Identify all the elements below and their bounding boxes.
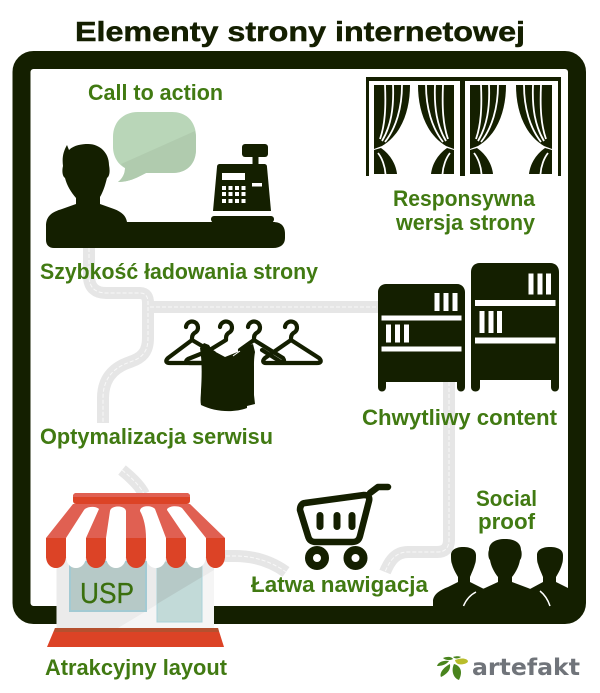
icon: tank top (200, 343, 255, 411)
logo wordmark: artefakt (472, 655, 580, 681)
icon: group of people (433, 539, 568, 607)
label: social: Social (476, 486, 537, 511)
label: responsive line two: wersja strony (395, 210, 536, 235)
label: attractive layout: Atrakcyjny layout (45, 655, 228, 680)
logo: artefakt (437, 655, 580, 681)
panel: storefront (45, 493, 228, 680)
icon: speech bubble (113, 112, 196, 182)
label: catchy content: Chwytliwy content (362, 405, 558, 430)
panel: social proof (433, 486, 568, 607)
road network (89, 248, 449, 572)
title: Elementy strony internetowej (75, 16, 525, 47)
panel: catchy content (362, 263, 559, 430)
icon: logo leaves (437, 656, 468, 680)
heading: call to action: Call to action (88, 80, 223, 105)
label: USP: USP (80, 578, 134, 610)
panel: call to action (40, 80, 319, 284)
icon: shopping cart (300, 487, 388, 566)
label: optimisation: Optymalizacja serwisu (40, 424, 273, 449)
frame (22, 60, 577, 615)
icon: left bookshelf (378, 284, 465, 392)
label: page speed: Szybkość ładowania strony (40, 259, 319, 284)
label: responsive line one: Responsywna (393, 186, 536, 211)
icon: cash register (211, 144, 274, 222)
icon: striped awning (46, 493, 225, 568)
label: proof: proof (478, 509, 536, 534)
panel: responsive version (366, 77, 561, 235)
icon: person silhouette at counter (46, 144, 285, 248)
icon: right bookshelf (471, 263, 559, 392)
label: easy navigation: Łatwa nawigacja (251, 572, 429, 597)
panel: optimisation (40, 322, 321, 449)
icon: curtains (366, 77, 561, 176)
icon: hangers (166, 322, 321, 363)
icon: shop building (47, 556, 224, 647)
panel: easy navigation (251, 487, 429, 597)
